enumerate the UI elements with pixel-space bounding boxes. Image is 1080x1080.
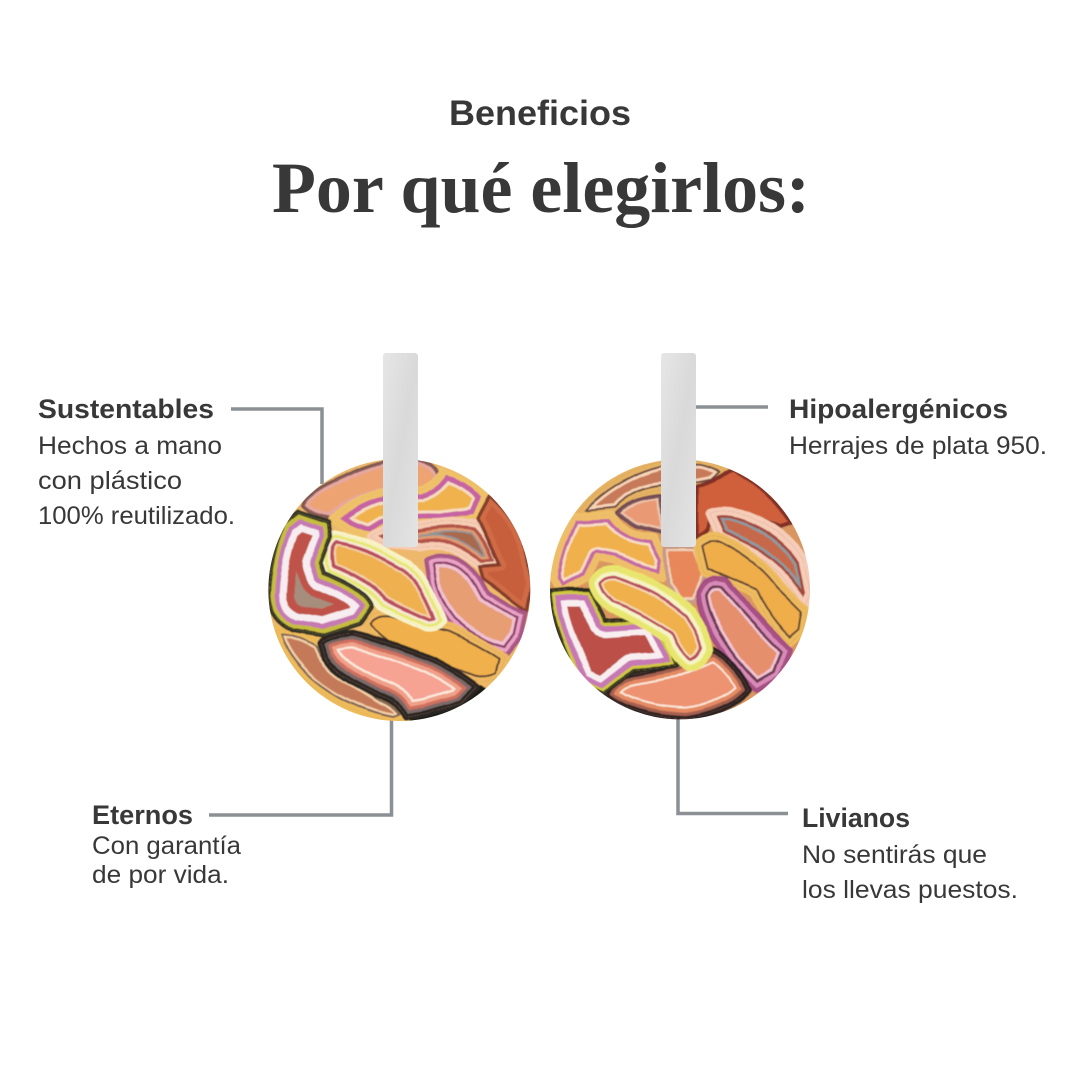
callout: sustentables: 100% reutilizado. bbox=[38, 502, 235, 530]
left earring silver bar bbox=[383, 353, 418, 547]
callout: eternos: Con garantía bbox=[92, 832, 241, 860]
left earring disc bbox=[268, 460, 530, 721]
connector: livianos bbox=[678, 718, 788, 814]
callout: eternos: Eternos bbox=[92, 800, 193, 830]
right earring bbox=[540, 353, 820, 730]
connector: sustentables bbox=[231, 409, 322, 484]
callout: livianos bbox=[802, 803, 1018, 904]
connector: eternos bbox=[209, 720, 392, 815]
title: Por qué elegirlos: bbox=[272, 148, 810, 228]
callout: livianos: No sentirás que bbox=[802, 841, 987, 869]
callout: sustentables: Hechos a mano bbox=[38, 432, 222, 460]
right earring disc bbox=[550, 460, 810, 720]
callout: hipoalergénicos bbox=[789, 394, 1047, 460]
left earring bbox=[260, 353, 540, 730]
callout: eternos bbox=[92, 800, 241, 889]
callout: sustentables bbox=[38, 394, 235, 530]
subtitle: Beneficios bbox=[449, 94, 631, 133]
callout: hipoalergénicos: Herrajes de plata 950. bbox=[789, 432, 1047, 460]
callout: hipoalergénicos: Hipoalergénicos bbox=[789, 394, 1008, 424]
right earring silver bar bbox=[661, 353, 696, 547]
callout: eternos: de por vida. bbox=[92, 861, 229, 889]
callout: sustentables: con plástico bbox=[38, 467, 182, 495]
callout: livianos: los llevas puestos. bbox=[802, 876, 1018, 904]
callout: sustentables: Sustentables bbox=[38, 394, 214, 424]
callout: livianos: Livianos bbox=[802, 803, 910, 833]
connector: hipoalergénicos bbox=[696, 405, 768, 409]
